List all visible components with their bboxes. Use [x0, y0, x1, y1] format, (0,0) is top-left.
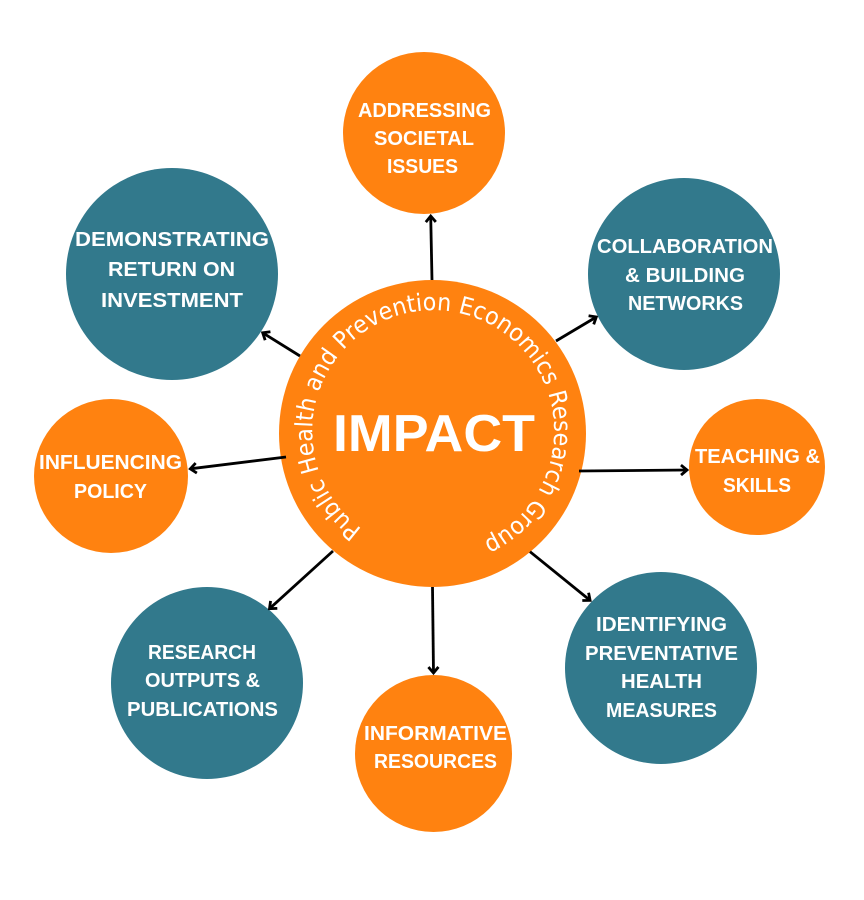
central hub: impact [279, 280, 586, 587]
node: demonstrating return on investment [66, 168, 278, 380]
arrow: to demonstrating return on investment [263, 333, 300, 356]
node: influencing policy: INFLUENCING [39, 452, 182, 474]
node: teaching and skills [689, 399, 825, 535]
node: demonstrating return on investment: INVESTMENT [101, 290, 243, 312]
node: research outputs and publications: OUTPUTS & [145, 670, 260, 692]
node: research outputs and publications: PUBLICATIONS [127, 699, 278, 721]
node: research outputs and publications [111, 587, 303, 779]
node: identifying preventative health measures: HEALTH [621, 671, 702, 693]
node: identifying preventative health measures: PREVENTATIVE [585, 643, 738, 665]
node: collaboration and building networks: NETWORKS [628, 293, 743, 315]
node: informative resources: RESOURCES [374, 751, 497, 773]
arrow: to addressing societal issues [431, 216, 432, 280]
node: collaboration and building networks: & BUILDING [625, 265, 745, 287]
node: addressing societal issues: ISSUES [387, 156, 458, 178]
arrow: to influencing policy [190, 457, 286, 469]
node: demonstrating return on investment: DEMONSTRATING [75, 229, 269, 251]
node: collaboration and building networks [588, 178, 780, 370]
node: research outputs and publications: RESEARCH [148, 642, 256, 664]
curved group name: Public Health and Prevention Economics Research Group [294, 292, 568, 551]
hub title: IMPACT [333, 405, 535, 463]
node: addressing societal issues: SOCIETAL [374, 128, 474, 150]
arrow: to teaching and skills [579, 470, 687, 471]
arrow: to informative resources [432, 587, 434, 673]
arrow: to research outputs and publications [270, 551, 333, 609]
node: demonstrating return on investment: RETURN ON [108, 259, 235, 281]
node: identifying preventative health measures [565, 572, 757, 764]
node: identifying preventative health measures: MEASURES [606, 700, 717, 722]
node: identifying preventative health measures: IDENTIFYING [596, 614, 727, 636]
node: teaching and skills: TEACHING & [695, 446, 820, 468]
node: collaboration and building networks: COLLABORATION [597, 236, 773, 258]
node: informative resources: INFORMATIVE [364, 723, 507, 745]
node: informative resources [355, 675, 512, 832]
node: teaching and skills: SKILLS [723, 475, 791, 497]
node: influencing policy: POLICY [74, 481, 148, 503]
node: addressing societal issues: ADDRESSING [358, 100, 491, 122]
node: addressing societal issues [343, 52, 505, 214]
node: influencing policy [34, 399, 188, 553]
arrow: to collaboration and building networks [556, 317, 596, 341]
arrow: to identifying preventative health measures [530, 552, 590, 600]
